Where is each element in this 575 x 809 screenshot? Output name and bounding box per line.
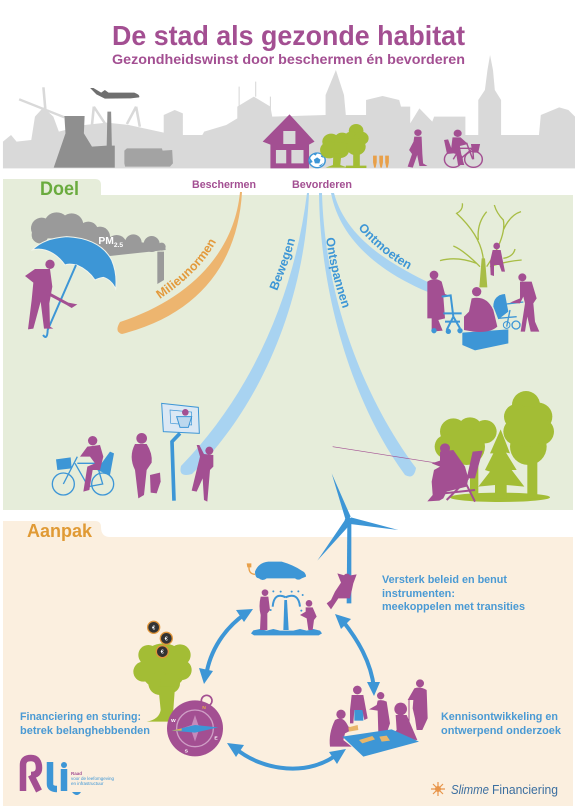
text: Kennisontwikkeling: Kennisontwikkeling en: [441, 711, 558, 723]
electric car and fountain: [247, 562, 322, 635]
man with pram: [510, 273, 539, 332]
compass: N: [202, 705, 206, 711]
map pieces: [348, 725, 390, 743]
kneeling woman: [388, 703, 417, 740]
sun icon: [431, 782, 445, 796]
seated person back: [350, 686, 368, 723]
turbine: [317, 473, 398, 603]
cycle arrow: top left: [199, 609, 253, 684]
wordmark: [451, 783, 558, 797]
curve: Bewegen: [180, 193, 309, 475]
text: Versterk beleid: Versterk beleid en benut: [382, 574, 507, 586]
text: Financiering: [20, 711, 150, 737]
Slimme Financiering logo: [431, 782, 558, 797]
power plant: [54, 112, 115, 168]
scene: meeting under a tree: [427, 203, 539, 350]
rider: [80, 436, 103, 492]
title: De stad als gezonde habitat: [112, 20, 465, 51]
house: [263, 114, 315, 168]
map on table: [342, 729, 419, 757]
curve: Ontspannen: [319, 193, 416, 476]
money tree with coins: €: [152, 625, 156, 631]
rollator: [431, 295, 463, 334]
chimney: [157, 252, 164, 284]
money tree with coins: €: [165, 636, 169, 642]
research group around a map: [330, 679, 428, 757]
wordmark: Slimme: [451, 783, 489, 797]
subtitle: Gezondheidswinst door beschermen én bevorderen: [112, 51, 465, 67]
logo text: voor de leefomgeving: [71, 776, 115, 781]
child in tree: [490, 243, 505, 276]
elderly woman: [427, 271, 450, 332]
panel background: [3, 521, 573, 806]
trees: [320, 124, 369, 168]
logo text: Raad: [71, 771, 82, 776]
trees: [435, 391, 554, 502]
seated woman left: [330, 710, 355, 747]
skyline silhouette: [3, 55, 575, 168]
child left: [259, 589, 270, 630]
panel: Doel: [3, 179, 573, 510]
seated person: [464, 287, 497, 332]
PM2.5 label: PM: [98, 236, 114, 247]
fountain: [251, 590, 322, 635]
tree: [133, 643, 192, 722]
curve label: Ontspannen: Ontspannen: [326, 238, 348, 308]
panel background: [3, 179, 573, 510]
standing elder: [408, 679, 428, 730]
cyclist: [444, 130, 482, 167]
curve: Milieunormen: [117, 192, 242, 334]
curve label: Bewegen: Bewegen: [269, 238, 295, 290]
basketball hoop: [162, 403, 199, 501]
charging plug: [247, 563, 255, 574]
logo text: en infrastructuur: [71, 781, 104, 786]
woman with dog: [132, 433, 161, 498]
airplane: [90, 88, 139, 99]
truck: [124, 148, 173, 167]
heading: Doel: Doel: [40, 179, 79, 200]
child right: [300, 600, 317, 630]
label: Beschermen: Beschermen: [192, 179, 256, 191]
logo letters: [23, 758, 64, 791]
money tree with coins: €: [161, 650, 165, 656]
wordmark: Financiering: [492, 783, 558, 797]
worker with shovel: [25, 260, 77, 329]
text: Versterk beleid: instrumenten:: [382, 588, 455, 600]
fisher: [427, 443, 468, 501]
compass: W: [171, 718, 176, 724]
pram: [493, 294, 523, 329]
bollards: [373, 156, 389, 168]
city skyline: [3, 55, 575, 168]
label: Bevorderen: Bevorderen: [292, 179, 352, 191]
scene: fishing among trees: [333, 391, 554, 502]
pedestrian: [408, 129, 427, 168]
coins: [148, 621, 172, 658]
lounging person: [327, 573, 357, 609]
text: Kennisontwikkeling: [441, 711, 562, 737]
text: Kennisontwikkeling: ontwerpend onderzoek: [441, 725, 562, 737]
cycle arrow: right: [335, 614, 380, 696]
Rli logo: [23, 758, 115, 795]
money tree with coins: [133, 621, 192, 722]
cycle arrow: bottom: [227, 743, 346, 769]
wind turbine with lounging person: [317, 473, 398, 609]
text: Financiering: betrek belanghebbenden: [20, 725, 150, 737]
umbrella: [32, 237, 116, 289]
text: Versterk beleid: meekoppelen met transities: [382, 601, 525, 613]
football: [309, 153, 325, 168]
text: Versterk beleid: [382, 574, 525, 613]
girl: [192, 445, 213, 502]
curve label: Ontmoeten: Ontmoeten: [360, 224, 411, 270]
bench: [462, 329, 508, 350]
scene: cyclist, walker and basketball: [52, 403, 213, 502]
curve: Ontmoeten: [331, 193, 432, 292]
bare tree: [440, 203, 522, 287]
fishing rod: [333, 447, 438, 463]
compass: E: [214, 735, 218, 741]
panel: Aanpak: [3, 473, 573, 806]
compass: S: [185, 749, 189, 755]
chair: [467, 451, 483, 478]
PM2.5 label: 2.5: [114, 242, 123, 249]
smoke cloud: [31, 212, 166, 256]
curve label: Milieunormen: Milieunormen: [156, 240, 216, 299]
compass: [167, 695, 223, 756]
logo text: [71, 771, 115, 786]
bicycle: [52, 457, 114, 495]
standing person: [369, 692, 390, 733]
car: [255, 562, 306, 580]
heading: Aanpak: Aanpak: [27, 521, 93, 541]
text: Financiering: Financiering en sturing:: [20, 711, 141, 723]
scene: umbrella against fine dust: [25, 212, 166, 337]
